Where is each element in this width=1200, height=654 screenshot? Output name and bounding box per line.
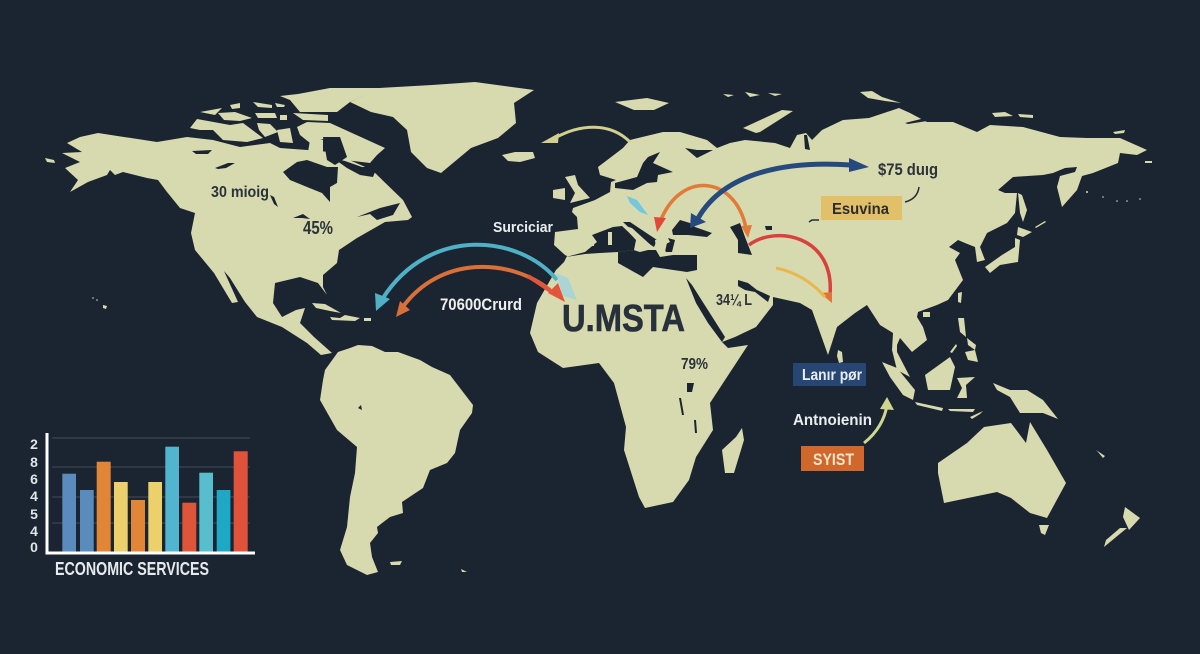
label: U.MSTA: U.MSTA	[562, 298, 685, 340]
continent: South America	[320, 345, 473, 575]
arrow: orange and red Atlantic arc	[396, 267, 565, 317]
tag: Lanır pør: Lanır pør	[802, 367, 862, 384]
arrow: navy double-headed arc	[690, 158, 869, 228]
label: 70600Crurd: 70600Crurd	[440, 295, 522, 314]
arrow: red arc to India	[749, 236, 832, 303]
chart bars	[62, 447, 248, 552]
tag: SYIST	[801, 446, 864, 471]
continents: Eurasia and Africa	[530, 108, 1147, 508]
label: $75 duıg: $75 duıg	[878, 160, 938, 179]
label: 30 mioig: 30 mioig	[211, 184, 269, 201]
tag: SYIST: SYIST	[813, 450, 855, 469]
islands	[390, 91, 1152, 572]
continent: Greenland	[350, 82, 534, 173]
label: Antnoienin: Antnoienin	[793, 412, 872, 429]
chart y-axis labels: 4	[30, 488, 38, 504]
arrow: light blue patch over Europe	[627, 196, 648, 215]
label: Surciciar: Surciciar	[493, 219, 553, 236]
chart y-axis labels: 4	[30, 523, 38, 539]
land details in the Mediterranean	[590, 225, 670, 256]
arrow: yellow line to India	[776, 268, 825, 297]
chart y-axis labels: 2	[30, 436, 38, 452]
label: 79%: 79%	[681, 356, 708, 373]
chart title: ECONOMIC SERVICES	[55, 559, 209, 579]
label: 34¼ L: 34¼ L	[716, 292, 752, 309]
chart axes	[47, 433, 255, 553]
tag: Esuvina	[821, 196, 902, 220]
arrow: orange arc over Black Sea	[654, 186, 752, 238]
chart y-axis labels: 6	[30, 471, 38, 487]
chart y-axis labels: 5	[30, 506, 38, 522]
chart y-axis labels	[30, 436, 38, 555]
callout marks near Esuvina	[809, 187, 919, 222]
label: 45%: 45%	[303, 218, 333, 238]
chart gridlines	[52, 438, 250, 523]
chart y-axis labels: 0	[30, 539, 38, 555]
arrow: pale green to Sumatra	[864, 397, 894, 443]
arrow: teal Atlantic arc	[375, 245, 577, 311]
bar chart: economic services	[30, 433, 255, 579]
world map	[45, 82, 1152, 575]
chart y-axis labels: 8	[30, 454, 38, 470]
tag: Esuvina: Esuvina	[832, 201, 889, 218]
tag: Lanır pør	[793, 363, 866, 386]
arrow: pale green to Greenland	[541, 127, 630, 143]
continent: North America	[45, 88, 412, 355]
seas and lakes cut into the land	[192, 118, 927, 433]
